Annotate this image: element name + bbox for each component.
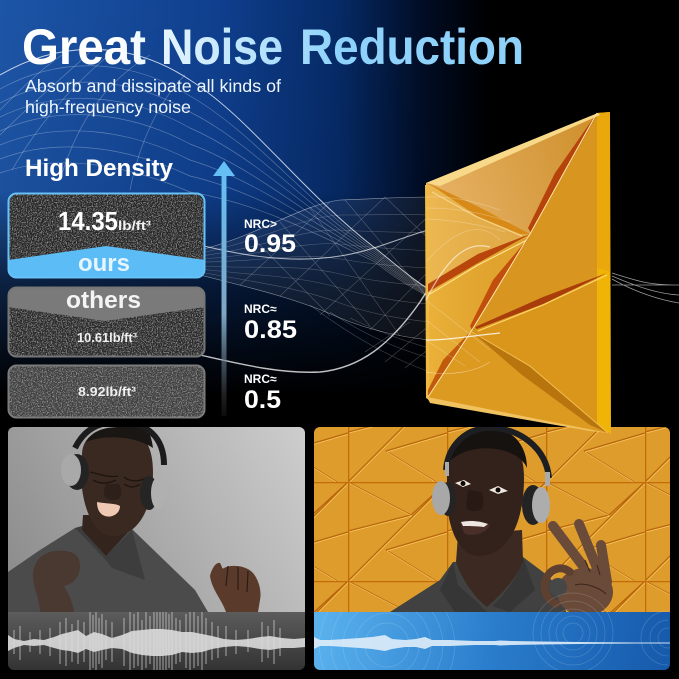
- eyes: [455, 480, 508, 494]
- card: others: 10.61lb/ft³: [77, 331, 137, 345]
- NRC label: 0.5: NRC≈: [244, 372, 277, 386]
- title: Reduction: [300, 19, 524, 75]
- card: ours: [8, 194, 205, 278]
- quiet waveform: [314, 593, 678, 677]
- nose: [104, 484, 121, 500]
- face: [447, 448, 524, 556]
- nose: [466, 490, 484, 511]
- right fist: [210, 563, 261, 612]
- headphones: [432, 428, 550, 525]
- NRC label: 0.85: NRC≈: [244, 302, 277, 316]
- left fist: [33, 551, 80, 612]
- neck: [82, 515, 130, 556]
- sound wave mesh: [0, 48, 679, 372]
- headphones: [61, 422, 165, 510]
- card: ours: ours: [78, 250, 130, 277]
- closed eyes: [90, 472, 146, 487]
- NRC label: 0.85: 0.85: [244, 316, 297, 344]
- title: Noise: [161, 19, 283, 75]
- heading: high density: High Density: [25, 155, 174, 182]
- face: [82, 435, 153, 532]
- subtitle: [25, 76, 281, 117]
- groove: long diagonal: [428, 113, 597, 397]
- title: Great: [22, 19, 146, 75]
- card: others: others: [66, 287, 141, 314]
- card: ours: 14.35: [58, 206, 118, 236]
- groove: middle right: [475, 273, 607, 331]
- groove: upper left: [428, 183, 530, 294]
- card: ours: lb/ft³: [118, 218, 152, 233]
- open mouth: [97, 502, 120, 517]
- neck: [456, 530, 523, 607]
- NRC label: 0.95: [244, 217, 296, 258]
- subtitle: high-frequency noise: [25, 97, 191, 117]
- NRC label: 0.5: 0.5: [244, 386, 281, 414]
- NRC label: 0.5: [244, 372, 281, 414]
- NRC label: 0.95: 0.95: [244, 230, 296, 258]
- card: lowest density: 8.92lb/ft³: [78, 385, 136, 399]
- groove: lower right: [472, 332, 608, 433]
- shirt: [8, 525, 208, 612]
- collar: [75, 526, 145, 580]
- OK hand: [545, 524, 613, 616]
- mouth: [460, 521, 490, 535]
- hair: [86, 427, 153, 448]
- noise waveform: [8, 612, 306, 670]
- arrow: density scale: [213, 161, 235, 416]
- card: others: [8, 287, 205, 356]
- NRC label: 0.95: NRC>: [244, 217, 277, 231]
- subtitle: Absorb and dissipate all kinds of: [25, 76, 281, 96]
- acoustic panel: [425, 112, 611, 434]
- hair: [449, 428, 527, 468]
- title: [22, 19, 524, 75]
- NRC label: 0.85: [244, 302, 297, 344]
- photo: man disturbed by noise: [8, 422, 306, 670]
- photo: man happy with reduced noise: [314, 427, 678, 677]
- collar: [440, 557, 535, 612]
- card: lowest density: [8, 366, 204, 418]
- shirt: [390, 557, 566, 612]
